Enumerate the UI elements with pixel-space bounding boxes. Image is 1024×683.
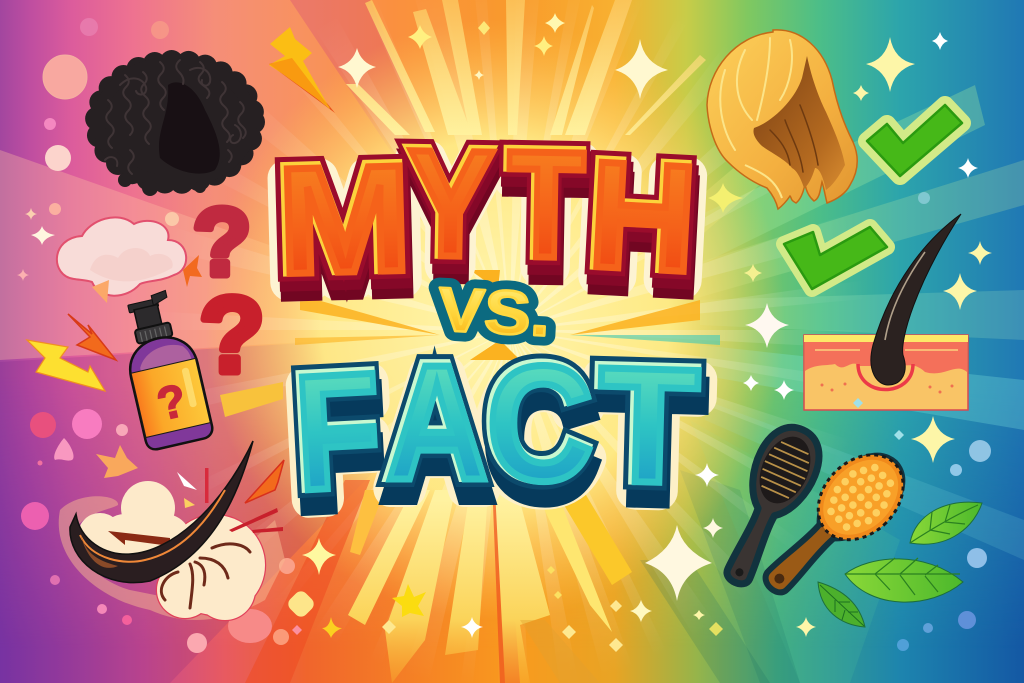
FACT extrusion: F	[292, 354, 386, 542]
MYTH orange face: M	[276, 134, 413, 307]
icon: middle leaf	[845, 558, 963, 602]
FACT extrusion: T	[597, 349, 702, 534]
FACT extrusion: C	[488, 349, 594, 532]
MYTH extrusion: M	[277, 152, 414, 325]
title: VS.: VS.	[436, 274, 552, 349]
title: FACT	[289, 330, 702, 542]
FACT dark outline: A	[384, 330, 486, 512]
MYTH orange face: H	[585, 128, 700, 304]
FACT light bevel: T	[594, 331, 699, 516]
icon: hair follicle in scalp	[804, 214, 968, 410]
MYTH yellow bevel	[274, 115, 698, 305]
icon: black paddle comb	[708, 418, 830, 594]
MYTH extrusion: Y	[407, 135, 496, 307]
icon: upper green check mark	[867, 105, 962, 176]
MYTH yellow bevel: T	[504, 117, 584, 288]
center bursts behind VS	[295, 270, 720, 360]
MYTH dark outline: T	[504, 117, 584, 288]
icon: blonde wig	[707, 30, 857, 209]
icon: orange triangle	[92, 280, 109, 303]
icon: orange lightning bolt	[68, 314, 116, 360]
MYTH dark outline: Y	[404, 115, 493, 287]
MYTH extrusion: T	[507, 137, 587, 308]
MYTH extrusion middle: H	[585, 136, 700, 312]
FACT teal face: A	[386, 332, 488, 514]
sparkles: left and center	[17, 13, 712, 652]
icon: top lightning bolt	[269, 27, 335, 113]
icon: yellow lightning bolt	[27, 340, 105, 391]
icon: shampoo bottle	[114, 287, 214, 451]
icon: afro curly hair	[97, 60, 253, 196]
FACT dark outline: F	[289, 336, 383, 524]
MYTH dark outline: M	[274, 132, 411, 305]
MYTH extrusion middle: T	[506, 127, 586, 298]
icon: top leaf	[910, 502, 982, 544]
MYTH cream outline: T	[506, 128, 586, 299]
icon: yellow accent bar	[220, 382, 283, 417]
MYTH extrusion: H	[586, 146, 701, 322]
FACT teal face: C	[487, 333, 593, 516]
title: VS.: VS.	[436, 274, 552, 349]
FACT cream outline: F	[291, 347, 385, 535]
FACT cream outline: C	[487, 342, 593, 525]
MYTH cream outline: M	[276, 143, 413, 316]
icon: orange bristle brush	[745, 437, 921, 613]
MYTH dark outline	[274, 115, 698, 305]
FACT dark outline: C	[485, 331, 591, 514]
MYTH extrusion middle: M	[276, 142, 413, 315]
icon: small leaf	[818, 582, 865, 627]
FACT light bevel: A	[384, 330, 486, 512]
MYTH orange face	[276, 117, 700, 307]
MYTH extrusion	[277, 135, 701, 325]
MYTH cream outline	[276, 126, 700, 316]
FACT teal face: T	[596, 333, 701, 518]
FACT light bevel: C	[485, 331, 591, 514]
MYTH cream outline: Y	[406, 126, 495, 298]
FACT light bevel	[289, 330, 699, 524]
central glow	[205, 20, 785, 620]
FACT teal face	[291, 332, 701, 526]
MYTH dark outline: H	[583, 126, 698, 302]
MYTH extrusion middle: Y	[406, 125, 495, 297]
icon: lower green check mark	[784, 227, 887, 289]
FACT dark outline: T	[594, 331, 699, 516]
FACT teal face: F	[291, 338, 385, 526]
icon: question mark two: ?	[199, 274, 265, 395]
radial light rays	[330, 150, 690, 510]
MYTH yellow bevel: M	[274, 132, 411, 305]
FACT extrusion: A	[387, 348, 489, 530]
icon: damaged hair strand	[59, 441, 285, 620]
FACT cream outline	[291, 341, 701, 535]
title: MYTH	[274, 115, 701, 325]
FACT light bevel: F	[289, 336, 383, 524]
bottom sunburst rays	[245, 480, 632, 683]
icon: pink drop	[54, 438, 74, 461]
sparkles: right side	[693, 32, 992, 637]
MYTH orange face: Y	[406, 117, 495, 289]
FACT cream outline: T	[596, 342, 701, 527]
FACT extrusion	[292, 348, 702, 542]
MYTH orange face: T	[506, 119, 586, 290]
MYTH cream outline: H	[585, 137, 700, 313]
icon: small orange burst	[183, 255, 202, 287]
icon: small autumn leaf burst	[96, 445, 138, 478]
icon: shampoo bottle: ?	[152, 373, 191, 430]
FACT dark outline	[289, 330, 699, 524]
icon: foam cloud	[57, 217, 186, 296]
FACT cream outline: A	[386, 341, 488, 523]
icon: question mark one: ?	[193, 189, 251, 296]
top sunburst rays	[346, 0, 706, 135]
MYTH extrusion middle	[276, 125, 700, 315]
MYTH yellow bevel: Y	[404, 115, 493, 287]
MYTH yellow bevel: H	[583, 126, 698, 302]
